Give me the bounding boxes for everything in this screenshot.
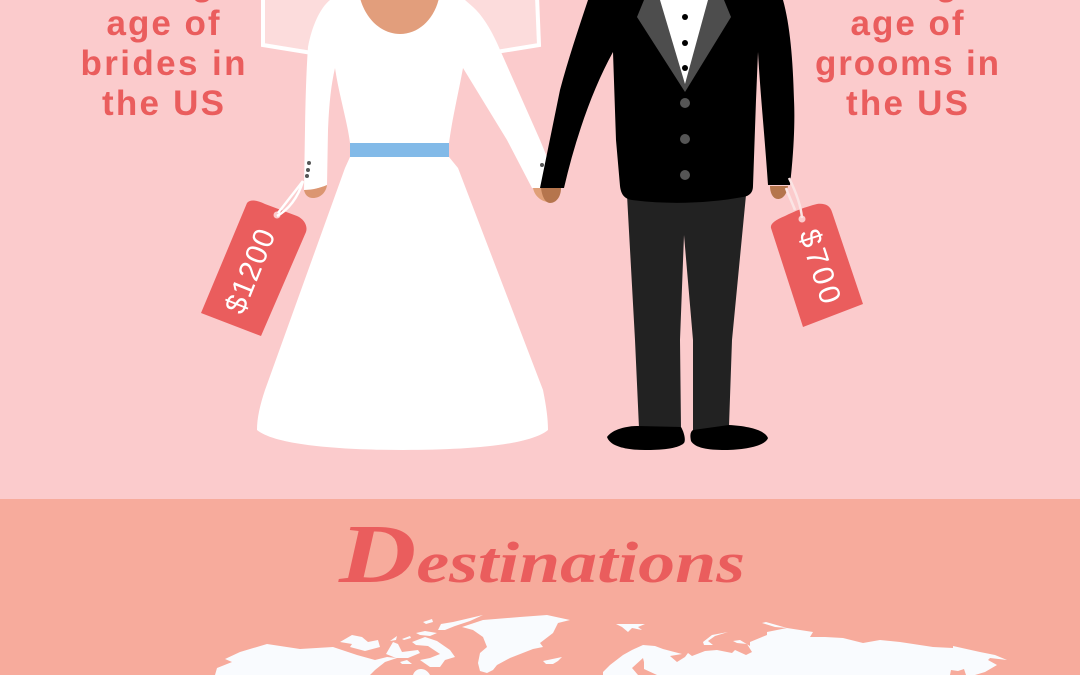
- world map: [215, 615, 1007, 675]
- groom skin: [533, 188, 552, 202]
- text: average age of brides: [80, 0, 246, 123]
- hudson coast: [413, 669, 430, 675]
- text: average age of brides: age of: [106, 4, 220, 43]
- shirt studs: [682, 14, 688, 71]
- trousers: [627, 195, 746, 431]
- severny: [762, 622, 787, 628]
- shirt: [660, 0, 708, 84]
- veil: [263, 0, 539, 53]
- svalbard: [616, 624, 645, 632]
- face: [360, 0, 439, 34]
- illustration: bride: [201, 0, 548, 450]
- shoes: [607, 425, 768, 450]
- heading: Destinations: D estinations: [338, 508, 745, 601]
- belt: [350, 143, 449, 157]
- baltic sea: [632, 658, 657, 675]
- price tag: groom: $700: [792, 225, 847, 308]
- jacket: [540, 0, 794, 203]
- iceland: [543, 657, 562, 664]
- text: average age of grooms: the US: [846, 84, 968, 123]
- lapels: [637, 0, 731, 92]
- text: average age of grooms: grooms in: [815, 44, 999, 83]
- sleeve buttons: [305, 161, 544, 178]
- jacket buttons: [680, 98, 690, 180]
- text: average age of grooms: age of: [850, 4, 964, 43]
- text: average age of brides: brides in: [80, 44, 246, 83]
- bride hand: [304, 185, 327, 198]
- text: average age of grooms: [815, 0, 999, 123]
- price tag: groom: [771, 178, 863, 327]
- text: average age of brides: the US: [102, 84, 224, 123]
- north america: [215, 644, 397, 675]
- dress: [257, 0, 548, 450]
- novaya zemlya: [703, 632, 728, 645]
- greenland: [462, 615, 570, 673]
- eurasia: [603, 628, 1007, 675]
- price tag: bride: $1200: [219, 224, 282, 318]
- sea of okhotsk: [950, 669, 966, 675]
- arctic islands: [340, 635, 380, 651]
- price tag: bride: [201, 181, 307, 336]
- illustration: groom: [533, 0, 863, 450]
